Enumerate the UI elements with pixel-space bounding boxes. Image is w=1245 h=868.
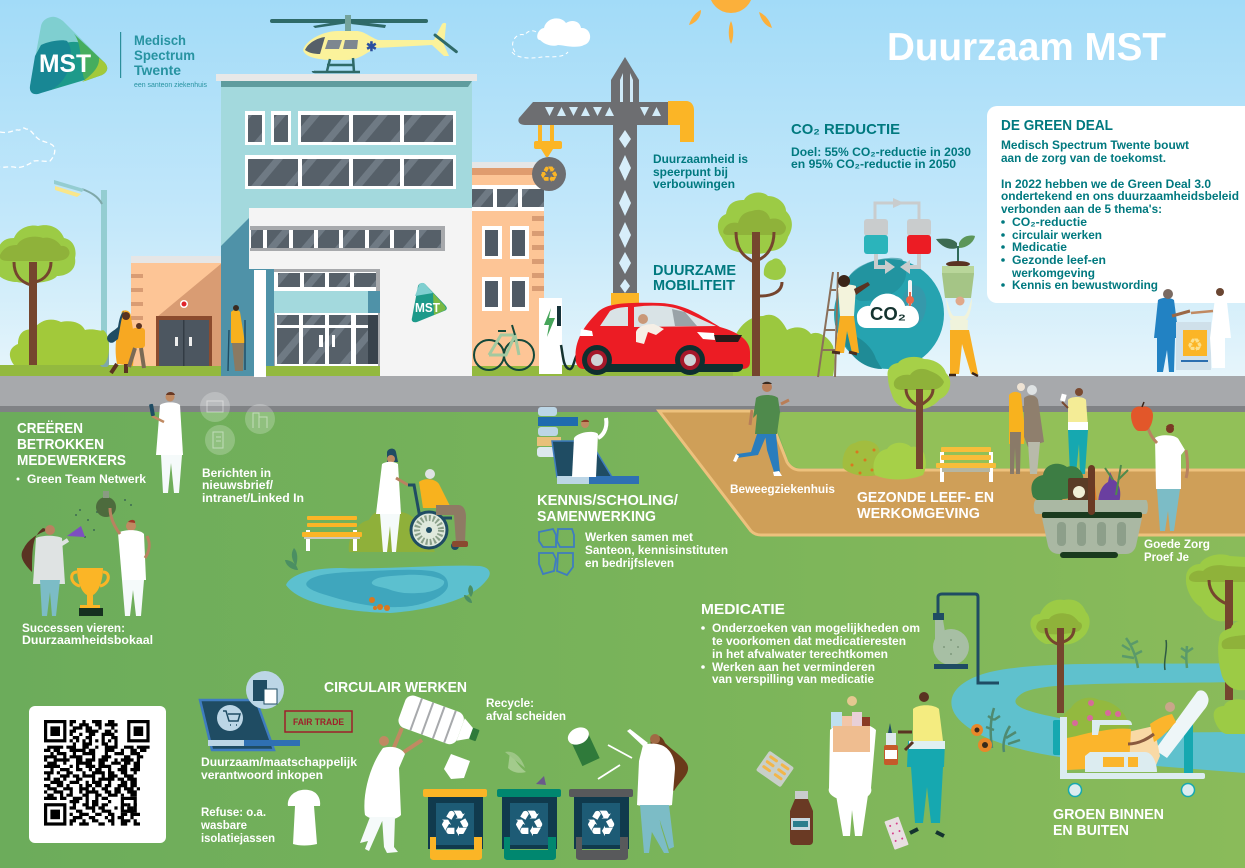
moving hospital label: Beweegziekenhuis [730, 482, 835, 496]
wheelchair [408, 485, 459, 550]
collaboration text [585, 530, 728, 570]
messages text [202, 466, 304, 505]
basket rim and body [1034, 500, 1148, 514]
logo triangle: MST [39, 50, 91, 78]
green cup [565, 724, 601, 767]
renovation text: verbouwingen [653, 177, 735, 191]
bush behind nurse [349, 509, 435, 552]
building logo: MST [415, 300, 440, 315]
sun [689, 0, 772, 44]
counterweight [668, 101, 694, 142]
tree mid [1030, 600, 1090, 713]
cabin windows [325, 40, 358, 49]
good care label [1144, 537, 1210, 564]
head [379, 736, 389, 746]
recycle text: afval scheiden [486, 709, 566, 723]
star of life: ✱ [366, 39, 377, 54]
bench left [302, 516, 362, 551]
medication section text: Onderzoeken van mogelijkheden om [712, 621, 920, 635]
wheels [582, 345, 705, 375]
flowers and ferns by river [971, 708, 1020, 752]
renovation text: Duurzaamheid is [653, 152, 748, 166]
grey bin [569, 789, 633, 860]
tree by bench with bushes [843, 357, 950, 480]
cockpit [305, 37, 325, 54]
title: Duurzaam MST [887, 26, 1166, 69]
purchasing text: verantwoord inkopen [201, 768, 323, 782]
medication section text: in het afvalwater terechtkomen [712, 647, 888, 661]
sky background [0, 0, 1245, 376]
recycle text [486, 696, 566, 723]
cart icon [217, 705, 243, 731]
hospital bed with patient [1053, 690, 1209, 796]
communication icons [200, 392, 275, 455]
trees lower right [971, 554, 1245, 752]
tree right [1186, 554, 1245, 700]
fair trade stamp: FAIR TRADE [293, 717, 344, 728]
headlight [697, 332, 715, 340]
bush edge [1214, 699, 1245, 734]
tail rotor [433, 33, 458, 54]
healthy environment heading: WERKOMGEVING [857, 505, 980, 522]
nurse with bottle [884, 692, 945, 836]
celebrate text: Successen vieren: [22, 621, 125, 635]
grille [714, 335, 742, 342]
upper windows [245, 111, 456, 189]
medication section text: Werken aan het verminderen [712, 660, 875, 674]
purchasing text: Duurzaam/maatschappelijk [201, 755, 357, 769]
lawn behind path [773, 412, 1245, 468]
green bin: ♻ [513, 804, 545, 845]
patient [419, 469, 468, 547]
nurse with wheelchair [376, 449, 468, 552]
bench right [936, 447, 996, 482]
celebrate text: Duurzaamheidsbokaal [22, 633, 153, 647]
right brick building [472, 162, 544, 366]
recycle ball [532, 157, 566, 191]
healthy environment heading: GEZONDE LEEF- EN [857, 489, 994, 506]
window strip [250, 226, 445, 251]
messages text: nieuwsbrief/ [202, 478, 274, 492]
bed base [1060, 773, 1205, 779]
spray bottle [884, 723, 898, 765]
panel: green deal: verbonden aan de 5 thema's: [1001, 202, 1162, 216]
runner [733, 382, 789, 476]
panel: green deal: Medisch Spectrum Twente bouwt [1001, 138, 1189, 152]
woman and child walking [107, 310, 145, 373]
medication section text: MEDICATIE [701, 601, 785, 618]
collaboration text: en bedrijfsleven [585, 556, 674, 570]
blister pack [756, 751, 794, 787]
creating engaged employees heading: CREËREN [17, 420, 83, 437]
wheels [1068, 784, 1194, 796]
refuse text: Refuse: o.a. [201, 805, 266, 819]
car windows [600, 306, 716, 327]
logo divider [120, 32, 121, 78]
logo wordmark: Twente [134, 62, 181, 78]
medicines in box [831, 712, 870, 728]
washable coat [288, 790, 320, 846]
lawn background [0, 406, 1245, 868]
panel: QR code [29, 706, 166, 843]
bed rail [1085, 720, 1157, 772]
tree edge [1218, 620, 1245, 690]
white block [249, 208, 472, 376]
celebrate text [22, 621, 153, 647]
panel: green deal [987, 106, 1245, 303]
ferns [1122, 638, 1193, 668]
entrance [249, 269, 380, 376]
roof [216, 74, 477, 87]
healthy environment heading [857, 489, 994, 522]
refuse text: isolatiejassen [201, 831, 275, 845]
renovation text [653, 152, 748, 191]
bed posts [1053, 717, 1193, 779]
refuse text [200, 805, 275, 845]
pond [285, 548, 490, 613]
crane base [611, 293, 639, 305]
confetti [75, 499, 132, 538]
grass strip behind road [0, 365, 770, 376]
elderly couple [1009, 383, 1044, 474]
air tanks [864, 198, 931, 274]
street lamp [54, 180, 109, 367]
knowledge heading: KENNIS/SCHOLING/ [537, 492, 679, 509]
logo [30, 17, 207, 94]
left low building [131, 256, 222, 366]
good care label: Proef Je [1144, 550, 1189, 564]
cotton swabs [598, 745, 632, 779]
patient [1067, 702, 1176, 770]
grey bin: ♻ [585, 804, 617, 845]
trophy [72, 568, 108, 616]
body and tail [303, 23, 449, 60]
charging station [539, 298, 597, 374]
collaboration text: Santeon, kennisinstituten [585, 543, 728, 557]
fair trade stamp [285, 711, 352, 732]
logo wordmark: een santeon ziekenhuis [134, 82, 207, 89]
good care label: Goede Zorg [1144, 537, 1210, 551]
blue doctor, bin and white doctor: ♻ [1187, 335, 1203, 356]
panel: green deal: Kennis en bewustwording [1012, 278, 1158, 292]
panel: green deal: Gezonde leef-en [1012, 253, 1106, 267]
water pump [933, 594, 999, 683]
refuse text: wasbare [200, 818, 247, 832]
renovation text: speerpunt bij [653, 165, 728, 179]
mast top [611, 57, 639, 102]
groen binnen heading: EN BUITEN [1053, 822, 1129, 839]
medication section text [701, 601, 920, 686]
knowledge illustration [537, 407, 639, 484]
green team bullet: Green Team Netwerk [27, 472, 146, 486]
purchasing laptop [200, 671, 300, 750]
jib [518, 102, 668, 125]
CO2 cloud [857, 294, 919, 328]
CO2 globe [834, 198, 944, 369]
recycle ball: ♻ [539, 163, 559, 188]
grass in front of entrance [266, 366, 380, 376]
tower [613, 102, 637, 297]
logo triangle [30, 17, 107, 94]
panel: green deal: werkomgeving [1011, 266, 1095, 280]
yellow bin: ♻ [439, 804, 471, 845]
vegetable basket [1031, 464, 1148, 558]
yellow bin [423, 789, 487, 860]
logo wordmark: Spectrum [134, 47, 195, 63]
groen binnen heading [1053, 806, 1164, 839]
panel: green deal: Medicatie [1012, 240, 1067, 254]
shaded wall [221, 218, 249, 376]
driver [636, 314, 664, 344]
doctor with medicine box [829, 696, 876, 836]
reeds and flowers [285, 548, 473, 603]
groen binnen heading: GROEN BINNEN [1053, 806, 1164, 823]
bottle [396, 693, 483, 753]
panel: green deal: circulair werken [1012, 228, 1102, 242]
glass bag [96, 491, 116, 517]
river [951, 663, 1245, 773]
hook [534, 125, 562, 157]
purchasing text [201, 755, 357, 782]
document icon [246, 671, 284, 709]
box [833, 726, 870, 752]
syrup bottle [790, 791, 813, 845]
mobility heading [653, 262, 736, 294]
medication section text: te voorkomen dat medicatieresten [712, 634, 906, 648]
vegetables [1031, 464, 1135, 512]
cloud left outline [0, 128, 55, 168]
man on crutches [228, 305, 245, 371]
seat [672, 309, 697, 326]
CO2 reductie text: Doel: 55% CO₂-reductie in 2030 [791, 145, 971, 159]
nurse [376, 449, 408, 552]
man [946, 296, 978, 376]
doctor in laptop [572, 418, 606, 477]
man pouring bottle [360, 693, 483, 853]
CO2 reductie text: en 95% CO₂-reductie in 2050 [791, 157, 956, 171]
panel: green deal: CO₂-reductie [1012, 215, 1087, 229]
doctor with apple [1131, 402, 1188, 531]
creating engaged employees heading: MEDEWERKERS [17, 452, 126, 469]
circular heading: CIRCULAIR WERKEN [324, 679, 467, 696]
pink flower bush [1061, 698, 1129, 738]
panel: green deal: In 2022 hebben we de Green Deal 3.0 [1001, 177, 1211, 191]
cup [444, 754, 470, 779]
red car [576, 303, 750, 375]
backrest [1155, 690, 1209, 758]
logo wordmark [134, 32, 207, 89]
finder patterns [46, 722, 148, 824]
legs [360, 817, 398, 853]
woman doctor right [627, 729, 688, 853]
blue doctor, bin and white doctor [1154, 288, 1231, 372]
QR data modules [44, 722, 150, 824]
logo wordmark: Medisch [134, 32, 186, 48]
nurse with note [1060, 388, 1088, 474]
messages text: intranet/Linked In [202, 491, 304, 505]
icon: linked hands [539, 529, 574, 575]
falling waste [505, 724, 632, 785]
coat [364, 747, 405, 820]
doctor with tablet [149, 392, 183, 493]
tree by car [718, 193, 834, 376]
rotor [270, 15, 428, 31]
skids [313, 58, 360, 72]
knowledge heading [537, 492, 679, 525]
thermometer [906, 280, 914, 306]
green bin [497, 789, 561, 860]
creating engaged employees heading: BETROKKEN [17, 436, 104, 453]
CO2 cloud: CO₂ [870, 304, 906, 324]
bicycle [474, 325, 534, 370]
crane [518, 57, 694, 305]
plant [936, 236, 975, 298]
panel: green deal: DE GREEN DEAL [1001, 117, 1113, 134]
underbody [584, 364, 743, 372]
doctor right [110, 508, 149, 616]
messages text: Berichten in [202, 466, 271, 480]
laptop [552, 441, 639, 484]
cloud near crane [512, 18, 590, 58]
creating engaged employees heading [17, 420, 126, 469]
panel: green deal: ondertekend en ons duurzaamheidsbeleid [1001, 189, 1239, 203]
walking path [659, 411, 1245, 535]
helicopter [270, 15, 458, 72]
door [156, 300, 212, 366]
mobility heading: DUURZAME [653, 262, 736, 279]
woman on ladder [818, 272, 870, 377]
tail light [580, 329, 593, 336]
mobility heading: MOBILITEIT [653, 277, 735, 294]
knowledge heading: SAMENWERKING [537, 508, 656, 525]
doctor left with cone [22, 525, 85, 616]
bins [423, 789, 633, 860]
CO2 reductie text: CO₂ REDUCTIE [791, 121, 900, 138]
collaboration text: Werken samen met [585, 530, 693, 544]
tree left with bush [0, 225, 109, 365]
plant pot and man [936, 236, 978, 376]
arms [392, 728, 422, 756]
books [537, 407, 578, 457]
panel: green deal: aan de zorg van de toekomst. [1001, 151, 1166, 165]
road [0, 376, 1245, 412]
celebration with trophy [22, 491, 149, 616]
white column [254, 270, 266, 377]
main hospital building [216, 74, 477, 377]
building logo [412, 283, 447, 322]
CO2 reductie text [791, 121, 971, 171]
recycle text: Recycle: [486, 696, 534, 710]
blister pack pink [884, 817, 909, 850]
medication section text: van verspilling van medicatie [712, 672, 874, 686]
